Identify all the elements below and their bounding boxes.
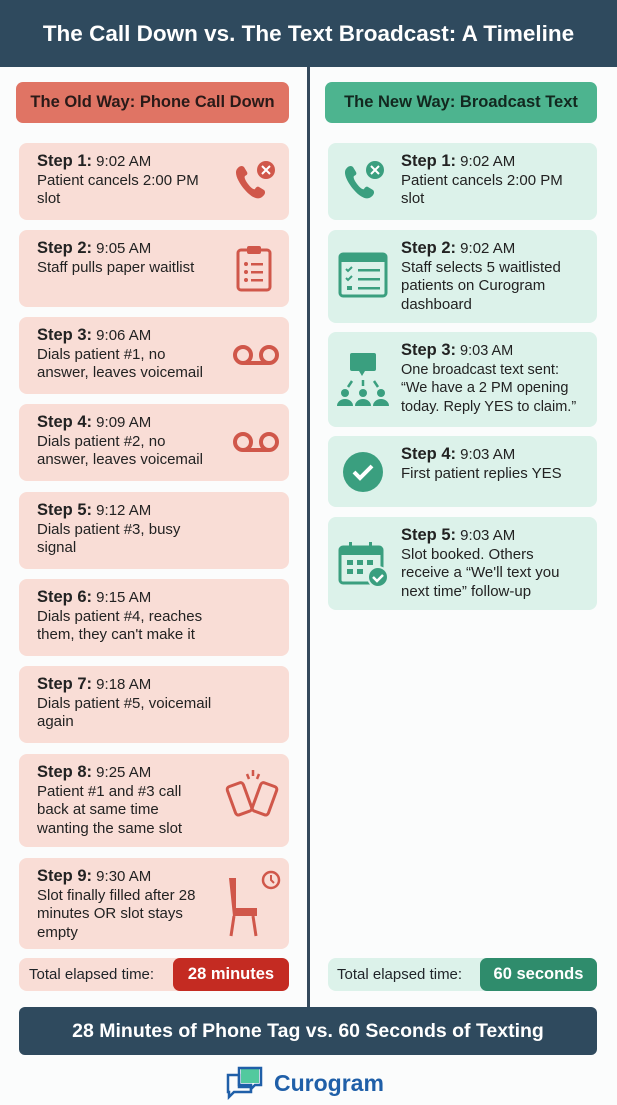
old step 9: Slot finally filled after 28 (37, 886, 195, 904)
bottom banner: 28 Minutes of Phone Tag vs. 60 Seconds of Texting (72, 1020, 544, 1042)
new step 5: next time” follow-up (401, 582, 531, 600)
old step 1: Patient cancels 2:00 PM (37, 172, 199, 188)
new step 3: Step 3: 9:03 AM (401, 341, 513, 359)
icon: dashboard list (338, 252, 388, 298)
old step 2: Step 2: 9:05 AM (37, 239, 151, 257)
old step 5: Step 5: 9:12 AM (37, 501, 151, 519)
old step 3: Dials patient #1, no (37, 346, 165, 362)
title banner (0, 0, 617, 67)
icon: chat bubbles (226, 1066, 262, 1100)
title banner: The Call Down vs. The Text Broadcast: A Timeline (43, 21, 574, 46)
badge: 60 seconds: 60 seconds (494, 965, 583, 983)
old step 3: answer, leaves voicemail (37, 364, 203, 381)
new step 1: Patient cancels 2:00 PM (401, 172, 563, 188)
old step 8: wanting the same slot (37, 820, 182, 836)
badge: 60 seconds (480, 958, 597, 991)
new step 4 (328, 436, 597, 507)
heading: old way (16, 82, 289, 123)
new step 5 (328, 517, 597, 610)
old step 8: Step 8: 9:25 AM (37, 763, 151, 781)
old step 9: empty (37, 924, 78, 940)
old step 2: Staff pulls paper waitlist (37, 258, 194, 276)
old step 5: signal (37, 539, 76, 556)
old total: Total elapsed time: (29, 966, 154, 983)
old step 7: again (37, 713, 74, 730)
icon: calendar check (338, 542, 387, 586)
old step 8 (19, 754, 289, 847)
heading: new way: The New Way: Broadcast Text (344, 93, 578, 111)
logo: Curogram (226, 1066, 384, 1100)
new step 2: patients on Curogram (401, 277, 545, 294)
old step 6 (19, 579, 289, 656)
new step 3: “We have a 2 PM opening (401, 380, 568, 396)
new total: Total elapsed time: (337, 966, 462, 983)
badge: 28 minutes: 28 minutes (188, 965, 274, 983)
old step 1 (19, 143, 289, 220)
icon: voicemail (233, 432, 279, 452)
old step 1: slot (37, 190, 60, 207)
icon: two phones (226, 770, 278, 816)
new step 1: slot (401, 190, 424, 207)
icon: voicemail (233, 345, 279, 365)
old total (19, 958, 289, 991)
heading: old way: The Old Way: Phone Call Down (30, 93, 275, 111)
old step 7: Dials patient #5, voicemail (37, 694, 211, 712)
old step 7 (19, 666, 289, 743)
old step 4 (19, 404, 289, 481)
new total (328, 958, 597, 991)
old step 1: Step 1: 9:02 AM (37, 152, 151, 170)
icon: broadcast to group (337, 353, 389, 406)
old step 8: back at same time (37, 801, 159, 818)
divider (307, 67, 310, 1007)
old step 6: them, they can't make it (37, 626, 195, 643)
new step 1 (328, 143, 597, 220)
new step 1: Step 1: 9:02 AM (401, 152, 515, 170)
icon: clipboard (236, 246, 272, 292)
bottom banner (19, 1007, 597, 1055)
old step 6: Step 6: 9:15 AM (37, 588, 151, 606)
icon: phone cancel green (345, 161, 384, 198)
new step 2: dashboard (401, 296, 472, 312)
old step 9: Step 9: 9:30 AM (37, 867, 151, 885)
logo: Curogram: Curogram (274, 1070, 384, 1096)
icon: phone cancel (236, 161, 275, 198)
old step 5: Dials patient #3, busy (37, 520, 180, 538)
old step 3 (19, 317, 289, 394)
old step 9: minutes OR slot stays (37, 905, 183, 922)
old step 9 (19, 858, 289, 949)
old step 5 (19, 492, 289, 569)
badge: 28 minutes (173, 958, 289, 991)
old step 7: Step 7: 9:18 AM (37, 675, 151, 693)
new step 5: Slot booked. Others (401, 546, 534, 562)
new step 5: receive a “We'll text you (401, 564, 559, 581)
new step 3: today. Reply YES to claim.” (401, 398, 576, 414)
new step 5: Step 5: 9:03 AM (401, 526, 515, 544)
new step 4: First patient replies YES (401, 464, 562, 482)
new step 2: Step 2: 9:02 AM (401, 239, 515, 257)
new step 2 (328, 230, 597, 323)
old step 2 (19, 230, 289, 307)
new step 3: One broadcast text sent: (401, 362, 559, 378)
old step 4: Dials patient #2, no (37, 432, 165, 450)
old step 3: Step 3: 9:06 AM (37, 326, 151, 344)
new step 4: Step 4: 9:03 AM (401, 445, 515, 463)
old step 4: Step 4: 9:09 AM (37, 413, 151, 431)
icon: chair clock (229, 870, 280, 936)
old step 8: Patient #1 and #3 call (37, 782, 181, 800)
new step 3 (328, 332, 597, 427)
old step 6: Dials patient #4, reaches (37, 608, 202, 624)
icon: check circle (343, 452, 383, 492)
heading: new way (325, 82, 597, 123)
old step 4: answer, leaves voicemail (37, 451, 203, 468)
new step 2: Staff selects 5 waitlisted (401, 258, 561, 276)
